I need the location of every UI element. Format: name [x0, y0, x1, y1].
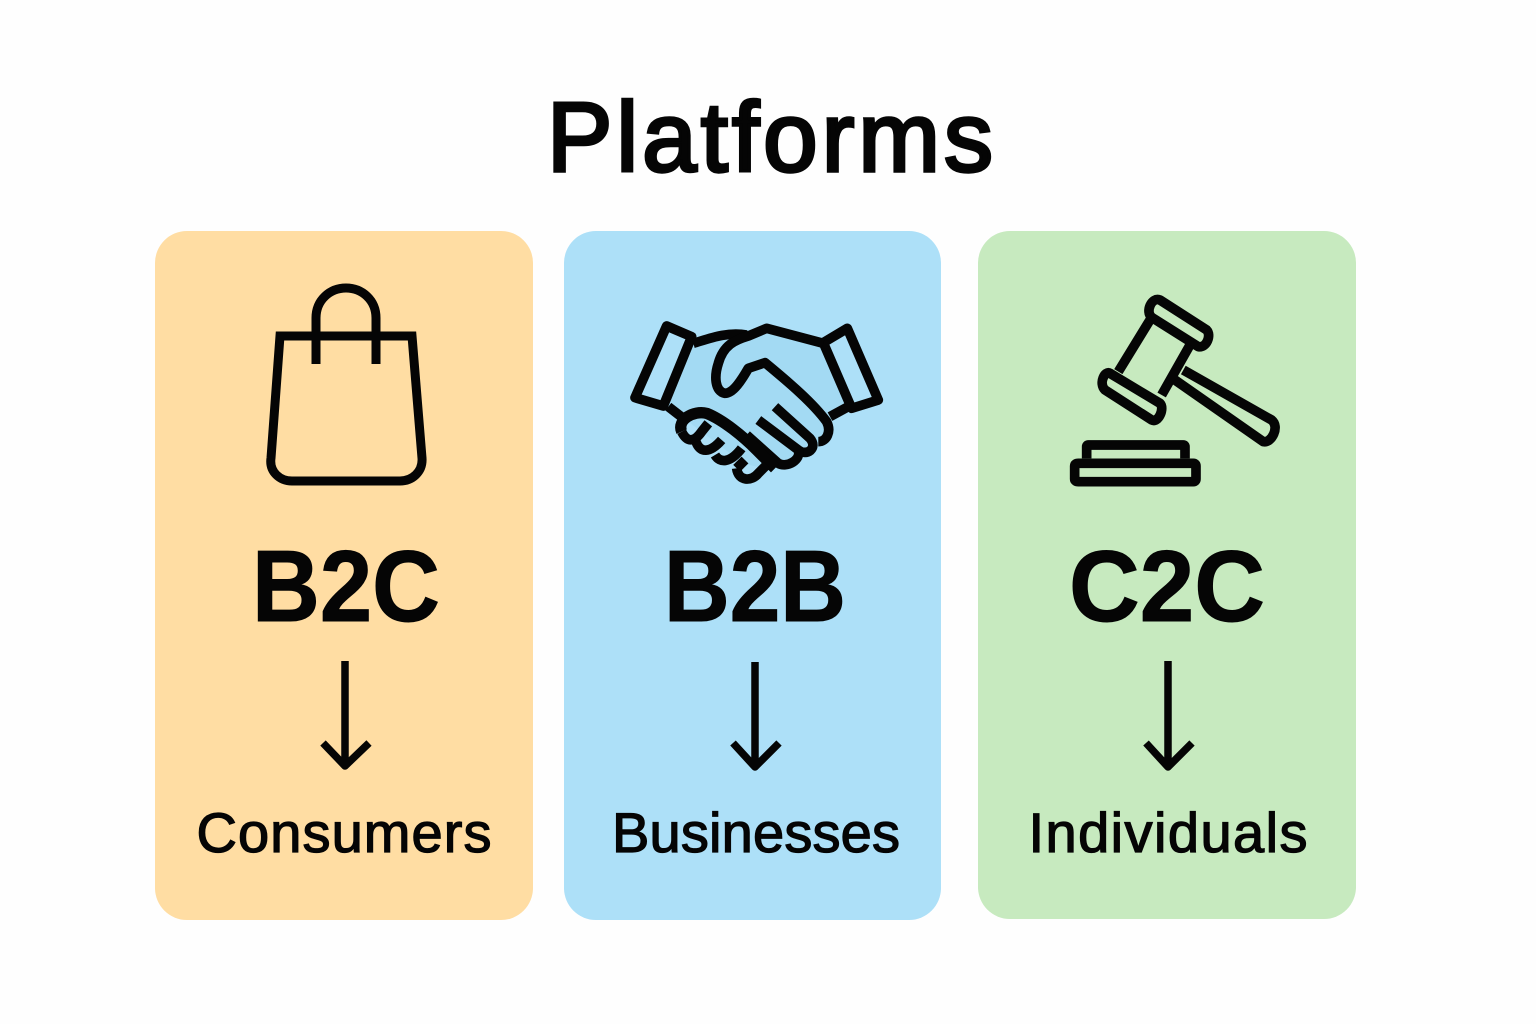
label: Individuals: Individuals: [1028, 801, 1308, 864]
label: Businesses: Businesses: [612, 801, 900, 864]
card background: C2C: [978, 231, 1356, 919]
panel: B2B: [564, 231, 941, 920]
icon: handshake: [635, 326, 878, 479]
arrow: C2C to individuals: [1146, 661, 1192, 767]
card background: B2B: [564, 231, 941, 920]
title: Platforms: [547, 82, 993, 192]
heading: B2C: B2C: [252, 531, 440, 643]
arrow: B2B to businesses: [733, 662, 779, 767]
card background: B2C: [155, 231, 533, 920]
icon: gavel: [1075, 300, 1275, 482]
heading: B2B: B2B: [664, 531, 846, 643]
label: Consumers: Consumers: [196, 801, 492, 864]
arrow: B2C to consumers: [323, 661, 369, 766]
icon: shopping bag: [271, 288, 422, 481]
heading: C2C: C2C: [1069, 531, 1265, 643]
panel: B2C: [155, 231, 533, 920]
panel: C2C: [978, 231, 1356, 919]
